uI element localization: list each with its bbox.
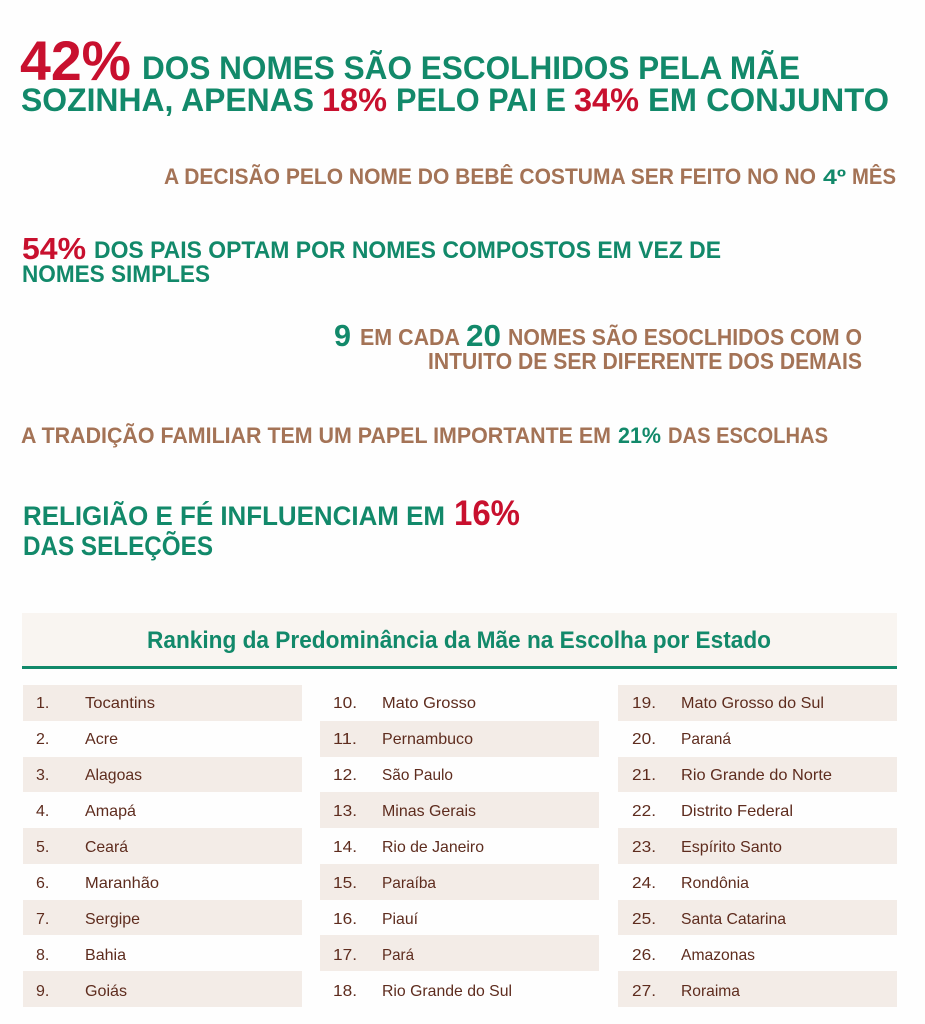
column 1 of ranking: Goiás <box>85 983 127 1000</box>
text: 54% compound names <box>22 231 721 288</box>
column 3 of ranking: 24. <box>632 875 656 892</box>
column 1 of ranking: 2. <box>36 731 49 748</box>
column 3 of ranking: Rondônia <box>681 875 749 892</box>
headline: 42% chosen by the mother: SOZINHA, APENAS <box>21 82 314 118</box>
column 2 of ranking: Rio Grande do Sul <box>382 983 512 1000</box>
column 1 of ranking: Ceará <box>85 839 128 856</box>
text: family tradition 21%: A TRADIÇÃO FAMILIAR TEM UM PAPEL IMPORTANTE EM <box>21 423 611 448</box>
text: 9 in 20 names <box>334 318 862 374</box>
headline: 42% chosen by the mother <box>20 29 889 118</box>
text: family tradition 21%: 21% <box>618 423 661 448</box>
column 3 of ranking: Roraima <box>681 983 740 1000</box>
column 3 of ranking: 26. <box>632 947 656 964</box>
column 1 of ranking: Maranhão <box>85 875 159 892</box>
text: decision in the 4th month: A DECISÃO PELO NOME DO BEBÊ COSTUMA SER FEITO NO NO <box>164 164 816 189</box>
text: 9 in 20 names: NOMES SÃO ESOCLHIDOS COM O <box>508 323 862 350</box>
column 2 of ranking: 13. <box>333 803 357 820</box>
column 3 of ranking: Amazonas <box>681 947 755 964</box>
column 2 of ranking: 18. <box>333 983 357 1000</box>
column 3 of ranking: Rio Grande do Norte <box>681 767 832 784</box>
column 1 of ranking: 1. <box>36 695 49 712</box>
column 2 of ranking: 17. <box>333 947 357 964</box>
column 1 of ranking: Bahia <box>85 947 126 964</box>
column 3 of ranking: 22. <box>632 803 656 820</box>
column 3 of ranking <box>618 685 897 1007</box>
column 3 of ranking: Santa Catarina <box>681 911 786 928</box>
text: 54% compound names: DOS PAIS OPTAM POR NOMES COMPOSTOS EM VEZ DE <box>94 237 721 264</box>
text: religion and faith 16%: RELIGIÃO E FÉ INFLUENCIAM EM <box>23 500 445 531</box>
column 2 of ranking: 16. <box>333 911 357 928</box>
column 3 of ranking: 27. <box>632 983 656 1000</box>
column 1 of ranking: Amapá <box>85 803 136 820</box>
column 1 of ranking: 6. <box>36 875 49 892</box>
column 2 of ranking: 11. <box>333 731 357 748</box>
text: 9 in 20 names: EM CADA <box>360 324 460 350</box>
text: religion and faith 16% <box>23 494 520 561</box>
column 1 of ranking: 9. <box>36 983 49 1000</box>
column 2 of ranking: 12. <box>333 767 357 784</box>
column 2 of ranking: São Paulo <box>382 767 453 784</box>
column 1 of ranking: Acre <box>85 731 118 748</box>
column 1 of ranking: 7. <box>36 911 49 928</box>
column 2 of ranking <box>320 695 599 1000</box>
column 1 of ranking: 5. <box>36 839 49 856</box>
headline: 42% chosen by the mother: 34% <box>574 82 639 118</box>
column 3 of ranking: 19. <box>632 695 656 712</box>
column 1 of ranking: Sergipe <box>85 911 140 928</box>
text: 54% compound names: 54% <box>22 231 86 266</box>
column 1 of ranking: 8. <box>36 947 49 964</box>
text: family tradition 21%: DAS ESCOLHAS <box>668 423 828 448</box>
column 2 of ranking: Paraíba <box>382 875 436 892</box>
column 3 of ranking: Paraná <box>681 731 731 748</box>
column 1 of ranking: 3. <box>36 767 49 784</box>
headline: 42% chosen by the mother: EM CONJUNTO <box>648 82 889 118</box>
column 1 of ranking <box>23 685 302 1007</box>
column 2 of ranking: Rio de Janeiro <box>382 839 484 856</box>
column 3 of ranking: Mato Grosso do Sul <box>681 695 824 712</box>
column 2 of ranking: Piauí <box>382 911 419 928</box>
column 3 of ranking: 20. <box>632 731 656 748</box>
text: 54% compound names: NOMES SIMPLES <box>22 261 210 288</box>
headline: 42% chosen by the mother: 18% <box>322 82 387 118</box>
column 2 of ranking: 10. <box>333 695 357 712</box>
column 2 of ranking: Pará <box>382 947 414 964</box>
column 1 of ranking: Alagoas <box>85 767 142 784</box>
heading: ranking title: Ranking da Predominância da Mãe na Escolha por Estado <box>147 627 771 654</box>
column 3 of ranking: 21. <box>632 767 656 784</box>
column 2 of ranking: Mato Grosso <box>382 695 476 712</box>
text: decision in the 4th month: 4º <box>823 166 846 189</box>
text: religion and faith 16%: 16% <box>454 494 520 533</box>
column 3 of ranking: Distrito Federal <box>681 803 793 820</box>
column 1 of ranking: 4. <box>36 803 49 820</box>
headline: 42% chosen by the mother: PELO PAI E <box>396 82 566 118</box>
column 2 of ranking: 14. <box>333 839 357 856</box>
text: 9 in 20 names: 20 <box>466 318 501 353</box>
column 3 of ranking: Espírito Santo <box>681 839 782 856</box>
headline: 42% chosen by the mother: DOS NOMES SÃO ESCOLHIDOS PELA MÃE <box>142 50 800 86</box>
column 2 of ranking: Minas Gerais <box>382 803 476 820</box>
text: 9 in 20 names: INTUITO DE SER DIFERENTE DOS DEMAIS <box>428 348 862 374</box>
text: religion and faith 16%: DAS SELEÇÕES <box>23 530 213 561</box>
column 2 of ranking: Pernambuco <box>382 731 473 748</box>
headline: 42% chosen by the mother: 42% <box>20 29 131 92</box>
column 3 of ranking: 25. <box>632 911 656 928</box>
column 2 of ranking: 15. <box>333 875 357 892</box>
text: 9 in 20 names: 9 <box>334 318 351 353</box>
panel: ranking header <box>22 613 897 669</box>
text: decision in the 4th month: MÊS <box>852 164 896 189</box>
column 1 of ranking: Tocantins <box>85 695 155 712</box>
column 3 of ranking: 23. <box>632 839 656 856</box>
